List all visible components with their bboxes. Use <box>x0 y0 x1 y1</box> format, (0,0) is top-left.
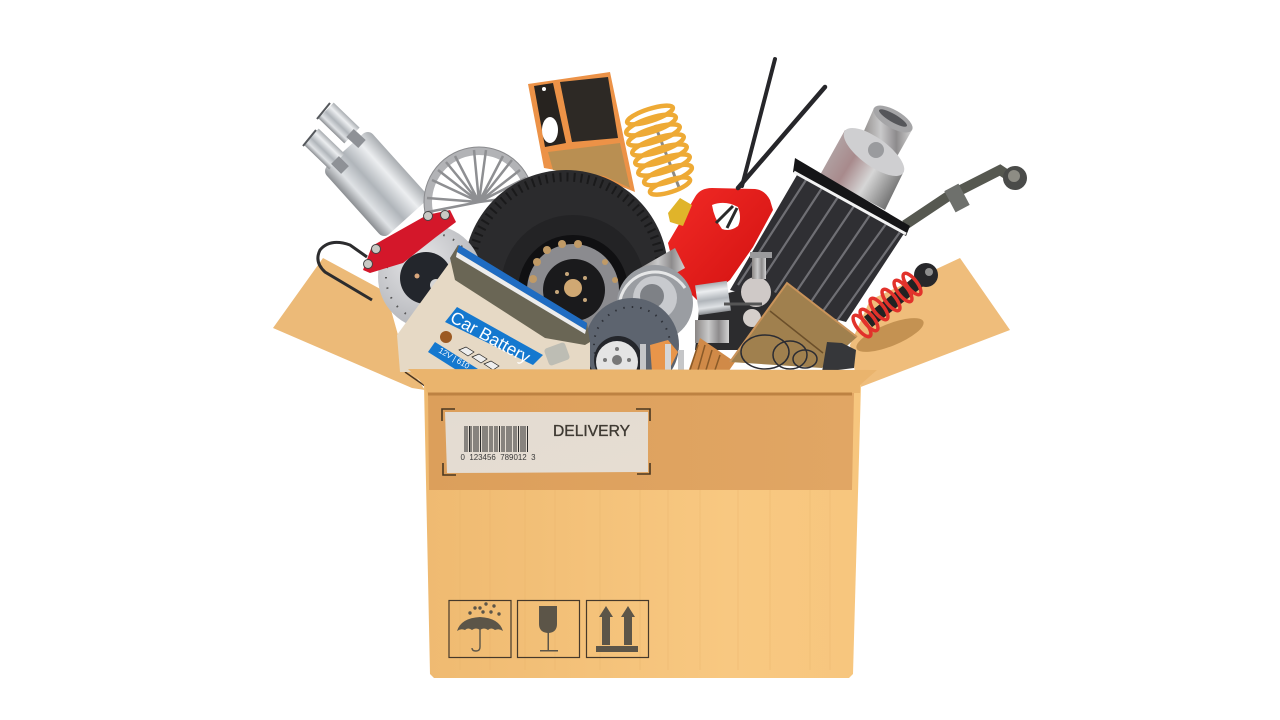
car battery <box>397 245 590 372</box>
wiper blades <box>738 59 825 188</box>
icon: keep dry umbrella <box>449 600 511 658</box>
barcode digits: 0 123456 789012 3 <box>460 453 536 462</box>
alloy wheel rim <box>424 147 534 257</box>
red fuel canister <box>668 188 773 303</box>
barcode <box>465 426 528 452</box>
radiator <box>730 158 910 322</box>
spark plugs and orange filter <box>640 338 735 372</box>
exhaust muffler, left <box>303 103 430 239</box>
shock arm <box>905 166 1027 225</box>
turbocharger <box>617 248 693 341</box>
tire and black steel wheel <box>464 170 668 374</box>
shaded flap area <box>428 393 854 490</box>
red shock absorber <box>850 263 938 339</box>
dark brake disc <box>585 298 679 392</box>
left box flap <box>273 258 425 390</box>
top rim <box>408 369 877 395</box>
cardboard box <box>408 369 877 678</box>
battery label: Car Battery: Car Battery <box>447 307 534 367</box>
piston and engine parts <box>695 252 790 350</box>
icon: this way up arrows <box>586 600 648 658</box>
panel filter and rubber rings <box>730 283 857 372</box>
right box flap <box>850 258 1010 388</box>
red brake caliper <box>363 210 456 273</box>
brake disc, left <box>378 225 482 329</box>
corrugation texture <box>460 490 830 670</box>
muffler, right <box>820 100 917 210</box>
battery spec strip <box>428 331 499 371</box>
oil filter <box>596 341 638 383</box>
battery spec strip: 12V | 610 <box>437 346 472 371</box>
serpentine belt <box>318 242 372 300</box>
air filter, orange frame <box>528 72 635 192</box>
label text: DELIVERY: DELIVERY <box>553 423 630 440</box>
yellow coil spring <box>624 102 694 198</box>
delivery label <box>442 409 650 475</box>
icon: fragile glass <box>518 600 580 658</box>
box front face <box>424 385 861 678</box>
